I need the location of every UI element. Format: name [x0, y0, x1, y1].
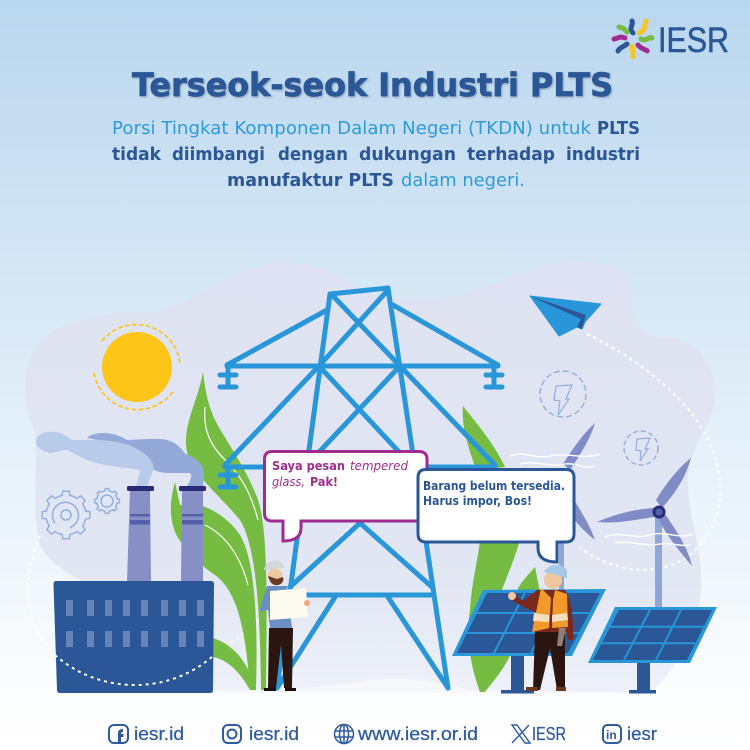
- right wind turbine: [597, 458, 693, 608]
- intro text block: Porsi Tingkat Komponen Dalam Negeri (TKDN) untuk: [112, 118, 592, 139]
- dotted orbit path: [28, 334, 720, 685]
- icon: facebook: [109, 725, 128, 743]
- ground mound: [214, 678, 660, 693]
- speech bubble: buyer: glass,: [272, 474, 305, 489]
- footer social links: [109, 723, 657, 744]
- dotted arc over factory: [55, 655, 214, 685]
- facebook handle: iesr.id: [134, 723, 184, 744]
- icon: linkedin: [603, 725, 621, 743]
- sun: [94, 325, 180, 410]
- speech bubble: buyer: Saya pesan: [272, 458, 345, 473]
- icon: X: [512, 725, 530, 743]
- worker right in orange vest: [508, 565, 573, 691]
- right plant leaves: [463, 406, 540, 692]
- icon: logo swirl: [614, 21, 652, 57]
- speech bubble: buyer: tempered: [350, 458, 408, 473]
- X handle: IESR: [532, 723, 566, 744]
- speech bubble: supplier: Harus impor, Bos!: [423, 493, 532, 508]
- website: www.iesr.or.id: [357, 723, 478, 744]
- intro text block: dengan: [278, 145, 348, 165]
- intro text block: tidak: [112, 145, 161, 165]
- icon: linkedin: in: [606, 728, 617, 742]
- large gear: [42, 491, 90, 539]
- intro text block: diimbangi: [172, 145, 265, 165]
- intro text block: industri: [566, 145, 640, 165]
- worker left with blueprint: [259, 560, 310, 691]
- icon: lightning circle small: [624, 431, 658, 465]
- logo wordmark: IESR: [658, 21, 729, 60]
- smoke: [36, 432, 204, 487]
- solar panel right: [588, 607, 717, 694]
- paper plane icon: [530, 296, 601, 336]
- logo: IESR: [614, 21, 729, 60]
- factory chimneys: [127, 486, 206, 581]
- intro text block: dalam negeri.: [401, 170, 525, 191]
- intro text block: dukungan: [359, 145, 456, 165]
- speech bubble: supplier: [418, 470, 574, 562]
- linkedin handle: iesr: [627, 723, 657, 744]
- speech bubble: buyer: [264, 452, 427, 541]
- speech bubble: buyer: Pak!: [310, 474, 338, 489]
- left wind turbine: [510, 423, 600, 600]
- gears icon: [42, 489, 119, 539]
- intro text block: PLTS: [597, 119, 640, 139]
- icon: instagram: [223, 725, 241, 743]
- speech bubble: supplier: Barang belum tersedia.: [423, 478, 565, 493]
- icon: globe: [334, 724, 354, 744]
- title: Terseok-seok Industri PLTS: [132, 66, 613, 104]
- left plant leaves: [171, 372, 267, 690]
- factory building: [54, 581, 214, 693]
- icon: lightning circle large: [540, 371, 586, 417]
- transmission tower: [220, 288, 502, 688]
- background blob: [25, 261, 715, 693]
- intro text block: manufaktur PLTS: [227, 171, 394, 191]
- factory windows: [66, 600, 204, 647]
- small gear: [95, 489, 119, 513]
- solar panel left: [452, 589, 606, 694]
- intro text block: terhadap: [467, 145, 555, 165]
- instagram handle: iesr.id: [249, 723, 299, 744]
- intro text block: [112, 118, 640, 191]
